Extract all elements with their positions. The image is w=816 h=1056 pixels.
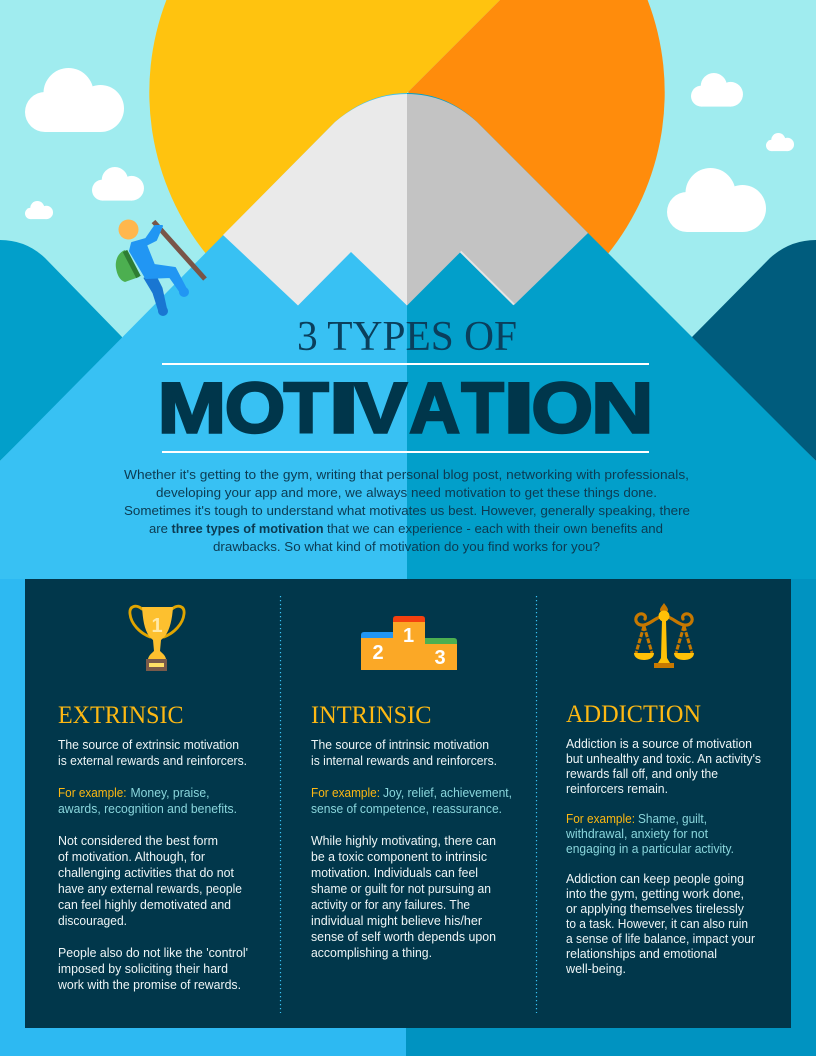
text: addiction definition: [566, 737, 761, 796]
title line two: A: [409, 370, 460, 449]
text: intrinsic detail: sense of self worth depends upon: [311, 930, 496, 944]
text: extrinsic detail: imposed by soliciting their hard: [58, 962, 228, 976]
title line two: O: [531, 370, 593, 449]
title line two: T: [461, 370, 504, 449]
text: intrinsic example: For example:: [311, 786, 380, 800]
text: extrinsic detail: [57, 834, 248, 992]
heading: addiction: ADDICTION: [566, 699, 701, 728]
text: extrinsic example: [58, 786, 237, 816]
text: extrinsic example: Money, praise,: [130, 786, 210, 800]
title line two: M: [158, 370, 226, 449]
text: addiction detail: into the gym, getting work done,: [566, 887, 744, 901]
text: addiction detail: Addiction can keep people going: [566, 872, 744, 886]
text: intrinsic definition: The source of intrinsic motivation: [311, 738, 489, 752]
text: addiction detail: [565, 872, 755, 976]
text: addiction detail: relationships and emotional: [566, 947, 717, 961]
text: intrinsic detail: accomplishing a thing.: [311, 946, 432, 960]
right hill: [692, 240, 816, 461]
cloud large right: [667, 168, 766, 232]
intro text: three types of motivation: [172, 521, 324, 536]
intro text: [124, 467, 690, 554]
title: [158, 314, 654, 453]
text: extrinsic definition: is external rewards and reinforcers.: [58, 754, 247, 768]
title line two: T: [284, 370, 329, 449]
left hill: [0, 240, 122, 461]
cloud small left: [25, 201, 53, 219]
intro text: drawbacks. So what kind of motivation do you find works for you?: [213, 539, 600, 554]
text: intrinsic definition: is internal rewards and reinforcers.: [311, 754, 497, 768]
text: addiction example: Shame, guilt,: [638, 812, 707, 826]
intro text: that we can experience - each with their own benefits and: [327, 521, 663, 536]
text: intrinsic detail: [311, 834, 496, 960]
text: extrinsic detail: challenging activities that do not: [58, 866, 235, 880]
text: extrinsic example: For example:: [58, 786, 126, 800]
text: extrinsic detail: People also do not like the 'control': [58, 946, 248, 960]
icon: trophy: 1: [151, 615, 163, 637]
text: addiction definition: but unhealthy and toxic. An activity's: [566, 752, 761, 766]
icon: podium: 2: [372, 642, 384, 664]
column: intrinsic: [311, 616, 512, 960]
text: extrinsic detail: of motivation. Although, for: [58, 850, 205, 864]
heading: extrinsic: EXTRINSIC: [58, 700, 184, 729]
cloud medium left: [92, 167, 144, 201]
text: extrinsic detail: discouraged.: [58, 914, 127, 928]
text: extrinsic example: awards, recognition and benefits.: [58, 802, 237, 816]
panel: three types: [25, 579, 791, 1028]
icon: trophy: [130, 606, 184, 671]
text: addiction detail: to a task. However, it can also ruin: [566, 917, 748, 931]
title line two: I: [328, 370, 360, 449]
bottom background right: [406, 579, 816, 1056]
icon: balance scales: [634, 603, 694, 668]
text: extrinsic detail: Not considered the best form: [58, 834, 218, 848]
main mountain left face: [0, 93, 408, 579]
text: extrinsic detail: have any external rewards, people: [58, 882, 242, 896]
main mountain right face: [407, 93, 816, 579]
text: addiction example: For example:: [566, 812, 635, 826]
cloud large left: [25, 68, 124, 132]
title rule top: [162, 363, 649, 365]
sun: [149, 0, 665, 255]
title line two: I: [502, 370, 535, 449]
text: intrinsic detail: individual might believe his/her: [311, 914, 482, 928]
text: intrinsic detail: shame or guilt for not pursuing an: [311, 882, 491, 896]
text: addiction example: withdrawal, anxiety for not: [565, 827, 709, 841]
text: addiction detail: or applying themselves tirelessly: [566, 902, 745, 916]
title line one: 3 TYPES OF: [297, 314, 517, 360]
text: addiction example: [565, 812, 734, 856]
icon: climber: [116, 220, 205, 316]
column: addiction: [565, 603, 761, 976]
heading: intrinsic: INTRINSIC: [311, 700, 432, 729]
text: intrinsic detail: motivation. Individuals can feel: [311, 866, 478, 880]
text: extrinsic definition: [58, 738, 247, 768]
snow cap light side: [223, 94, 407, 306]
text: intrinsic detail: be a toxic component to intrinsic: [311, 850, 487, 864]
cloud small right: [766, 133, 794, 151]
bottom background left: [0, 579, 406, 1056]
text: addiction definition: rewards fall off, and only the: [566, 767, 718, 781]
title rule bottom: [162, 451, 649, 453]
cloud medium right: [691, 73, 743, 107]
text: intrinsic example: Joy, relief, achievement,: [383, 786, 512, 800]
title line two: V: [354, 370, 407, 449]
text: intrinsic detail: activity or for any failures. The: [311, 898, 470, 912]
text: intrinsic example: sense of competence, reassurance.: [311, 802, 502, 816]
illustration: sun and mountains: [0, 0, 816, 579]
text: intrinsic definition: [311, 738, 497, 768]
title line two: [158, 370, 654, 449]
intro text: are: [149, 521, 168, 536]
text: extrinsic detail: work with the promise of rewards.: [57, 978, 241, 992]
intro text: developing your app and more, we always need motivation to get these things done.: [156, 485, 657, 500]
text: intrinsic detail: While highly motivating, there can: [311, 834, 496, 848]
text: extrinsic detail: can feel highly demotivated and: [58, 898, 231, 912]
text: intrinsic example: [311, 786, 512, 816]
intro text: Whether it's getting to the gym, writing that personal blog post, networking with professionals,: [124, 467, 689, 482]
text: addiction detail: a sense of life balance, impact your: [566, 932, 755, 946]
title line two: O: [225, 370, 285, 449]
text: addiction detail: well-being.: [565, 962, 626, 976]
text: extrinsic definition: The source of extrinsic motivation: [58, 738, 239, 752]
text: addiction definition: Addiction is a source of motivation: [566, 737, 752, 751]
intro text: Sometimes it's tough to understand what motivates us best. However, generally speaking, there: [124, 503, 690, 518]
snow cap shaded side: [407, 94, 588, 306]
column: extrinsic: [57, 606, 248, 992]
icon: podium: [361, 616, 457, 670]
icon: podium: 1: [403, 625, 414, 647]
title line two: N: [591, 370, 654, 449]
text: addiction example: engaging in a particular activity.: [566, 842, 734, 856]
text: addiction definition: reinforcers remain.: [566, 782, 668, 796]
icon: podium: 3: [434, 647, 446, 669]
